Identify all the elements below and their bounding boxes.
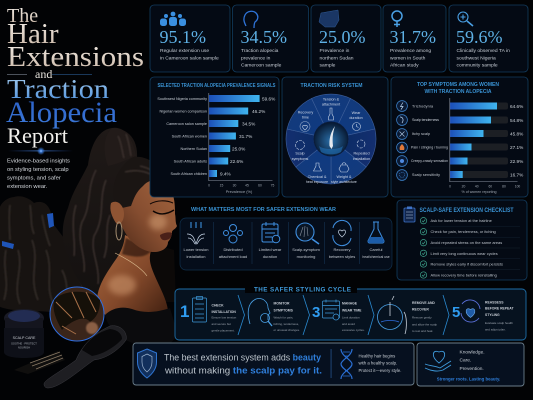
bar chart: 46.2% xyxy=(252,109,265,114)
illustration: scalp close-up xyxy=(50,287,104,341)
bar chart: 30 xyxy=(233,184,236,188)
bar chart: 34.5% xyxy=(242,122,255,126)
item: careful heat: Careful xyxy=(370,247,383,252)
bar chart: 59.6% xyxy=(262,96,275,102)
stat card: South African women: African study xyxy=(390,63,419,69)
icon: clipboard xyxy=(404,206,415,222)
segment labels: attachment xyxy=(322,102,340,106)
subtitle text block: extension wear. xyxy=(7,184,48,190)
panel: what matters icons xyxy=(180,218,392,270)
wheel diagram xyxy=(286,94,376,184)
stat card: northern Sudan: northern Sudan xyxy=(320,55,354,61)
bars: symptoms: 64.6% xyxy=(510,104,523,109)
item: recovery: between styles xyxy=(329,254,355,259)
stat card: traction alopecia Cameroon: Cameroon sample xyxy=(241,63,282,69)
segment labels: time xyxy=(302,116,309,120)
item: recovery: Recovery xyxy=(334,247,350,252)
side text xyxy=(358,354,401,373)
step 1 xyxy=(180,296,237,332)
heading: TRACTION RISK SYSTEM xyxy=(300,83,362,89)
stat card: northern Sudan xyxy=(311,5,381,72)
step 4: REMOVE AND xyxy=(412,301,435,305)
panel: prevalence bar chart xyxy=(150,77,279,197)
icon: shield xyxy=(138,349,156,378)
bar chart: 60 xyxy=(258,184,262,188)
item: scalp monitoring: Scalp-symptom xyxy=(292,247,320,252)
item: distributed load: Distributed xyxy=(223,247,243,252)
bars: symptoms: 0 xyxy=(449,184,451,188)
stat card: regular extension use xyxy=(150,5,230,72)
bar chart: Nigerian women comparison xyxy=(159,110,207,114)
step 3: excessive cycles. xyxy=(342,328,365,332)
bars: symptoms: 60 xyxy=(488,184,492,188)
stat card: traction alopecia Cameroon: prevalence in xyxy=(241,55,271,61)
title xyxy=(6,5,144,155)
necklace xyxy=(115,253,147,276)
ear xyxy=(110,202,124,224)
bars: symptoms: 45.8% xyxy=(510,132,523,136)
step 2: MONITOR xyxy=(274,302,290,306)
stat card: southwest Nigeria: community sample xyxy=(456,63,498,69)
bar chart xyxy=(157,93,275,194)
bar chart: 0 xyxy=(208,184,210,188)
segment icons xyxy=(296,108,365,172)
bar chart: 15 xyxy=(220,184,223,188)
chevrons xyxy=(238,295,449,335)
icon: heart in hand xyxy=(425,351,451,371)
icon: Sudan map xyxy=(319,10,339,27)
step 3: Limit duration xyxy=(342,316,360,320)
icons: symptoms xyxy=(397,101,407,180)
item: scalp monitoring: monitoring xyxy=(297,254,315,259)
segment labels: symptoms xyxy=(292,157,309,161)
bar chart: South African children xyxy=(171,172,207,176)
callout: knowledge, care, prevention: Knowledge. xyxy=(460,350,485,356)
step 2: itching, tenderness, xyxy=(274,322,299,326)
illustration: hair bundles xyxy=(0,196,99,312)
panel: traction risk system xyxy=(282,77,388,197)
icon: magnifier xyxy=(458,12,473,26)
subtitle text block: symptoms, and safer xyxy=(7,175,61,181)
hair behind neck right xyxy=(140,240,176,302)
step 5: STYLING xyxy=(485,313,500,317)
panel: top symptoms xyxy=(391,77,528,197)
step 1: 1 xyxy=(180,302,189,321)
segment labels: Scalp xyxy=(295,152,305,156)
title: The xyxy=(7,5,38,27)
segment labels: Chemical & xyxy=(308,175,327,179)
step 2: or unusual changes. xyxy=(274,328,300,332)
stat card: regular extension use: 95.1% xyxy=(160,27,206,47)
subtitle text block: Evidence-based insights xyxy=(7,159,70,165)
highlight on shoulder xyxy=(108,275,136,295)
bar chart: South African adults xyxy=(174,160,207,164)
stat card: southwest Nigeria xyxy=(449,5,528,72)
bars: symptoms: 100 xyxy=(515,184,520,188)
hair back mass xyxy=(63,128,150,296)
cheek highlight xyxy=(149,214,167,230)
step 5: Evaluate scalp health xyxy=(485,321,513,325)
step 3: WEAR TIME xyxy=(342,308,362,312)
bar chart: Prevalence (%) xyxy=(226,189,253,194)
segment labels: heat exposure xyxy=(306,180,328,184)
icon: head profile xyxy=(244,11,258,28)
step 5 xyxy=(452,300,515,332)
segment labels: style architecture xyxy=(331,180,357,184)
callout: beauty without scalp cost: without making the scalp pay for it. xyxy=(164,366,322,376)
bars: symptoms: % of women reporting xyxy=(462,190,496,194)
icon: people xyxy=(160,12,186,26)
checklist items xyxy=(420,218,520,278)
segment labels: duration xyxy=(349,116,363,120)
symptom labels: Pain / stinging / burning xyxy=(411,146,448,150)
step 1: Ensure low tension xyxy=(212,316,237,320)
bar chart: 31.7% xyxy=(239,134,252,139)
bars: symptoms: 22.9% xyxy=(510,159,523,164)
side text: Healthy hair begins xyxy=(358,354,395,358)
step 1: CHECK xyxy=(212,304,224,308)
checklist items: Avoid repeated stress on the same areas xyxy=(430,240,502,245)
side text: Protect it—every style. xyxy=(358,368,401,373)
stat card: South African women xyxy=(383,5,446,72)
bar chart: 75 xyxy=(271,184,274,188)
item: limited wear: duration xyxy=(263,254,277,259)
subtitle text block: on styling tension, scalp xyxy=(7,167,69,173)
segment labels: Weight & xyxy=(337,175,352,179)
neck shadow xyxy=(122,238,152,257)
stat card: South African women: women in South xyxy=(390,55,426,61)
stat card: southwest Nigeria: Clinically observed TA in xyxy=(456,48,510,54)
illustration: hair brush and comb xyxy=(14,326,126,388)
heading: SELECTED TRACTION ALOPECIA PREVALENCE SIGNALS xyxy=(158,83,276,89)
stat card: northern Sudan: 25.0% xyxy=(319,27,366,47)
bars: symptoms: 20 xyxy=(462,184,465,188)
step 3 xyxy=(312,300,365,332)
title: Hair xyxy=(7,18,59,50)
segment labels: Repeated xyxy=(354,152,370,156)
title: Alopecia xyxy=(6,96,117,129)
title: Report xyxy=(7,123,68,148)
item: scalp monitoring xyxy=(292,223,320,259)
item: recovery xyxy=(329,220,355,259)
bar chart: 22.6% xyxy=(230,159,243,164)
step 4: Remove gently xyxy=(412,316,432,320)
symptom labels xyxy=(411,104,448,177)
symptom labels: Scalp tenderness xyxy=(412,118,439,122)
symptom labels: Creepy-crawly sensation xyxy=(411,159,448,163)
heading: what matters most: WHAT MATTERS MOST FOR SAFER EXTENSION WEAR xyxy=(191,207,337,213)
bar chart: South African women xyxy=(172,134,207,138)
step 5: REASSESS xyxy=(485,300,504,304)
illustration: woman with ponytail xyxy=(63,128,178,344)
stat card: traction alopecia Cameroon xyxy=(232,5,308,72)
bar chart: Northern Sudan xyxy=(181,147,207,151)
earring xyxy=(116,222,122,240)
heading: THE SAFER STYLING CYCLE xyxy=(254,286,351,294)
checklist items: Check for pain, tenderness, or itching xyxy=(430,229,496,234)
item: lower tension xyxy=(184,222,208,259)
illustration: scalp care jar: NOURISH xyxy=(18,346,30,350)
step 4: and allow the scalp xyxy=(412,322,437,326)
bars: symptoms: 27.1% xyxy=(510,145,523,150)
bar chart: 45 xyxy=(245,184,249,188)
step 1: INSTALLATION xyxy=(212,310,236,314)
illustration: scalp care jar xyxy=(4,309,44,358)
step 4: RECOVER xyxy=(412,308,429,312)
symptom labels: Itchy scalp xyxy=(412,132,430,136)
item: careful heat xyxy=(362,222,390,259)
item: lower tension: Lower tension xyxy=(184,247,208,252)
segment labels: Recovery xyxy=(298,110,313,114)
stat card: regular extension use: in Cameroon salon sample xyxy=(160,55,219,61)
step 3: and avoid xyxy=(342,322,355,326)
title: Traction xyxy=(7,74,110,104)
bar chart: Southwest Nigeria community xyxy=(157,97,207,101)
callout: beauty without scalp cost xyxy=(133,343,414,385)
step 1: and secure but xyxy=(212,322,231,326)
checklist items: Limit very long continuous wear cycles xyxy=(430,251,498,256)
statement: The best extension system adds beauty xyxy=(164,352,321,362)
hair highlights xyxy=(73,134,162,284)
bars: symptoms: 80 xyxy=(502,184,506,188)
bars: symptoms xyxy=(449,98,523,194)
callout: knowledge, care, prevention: Prevention. xyxy=(460,366,484,372)
hub: hair follicle xyxy=(314,122,348,156)
step 1: gentle placement. xyxy=(212,328,235,332)
segment labels: Tension & xyxy=(323,98,340,102)
stat card: northern Sudan: Prevalence in xyxy=(320,48,350,54)
step 2 xyxy=(248,299,300,332)
stat card: southwest Nigeria: southwest Nigeria xyxy=(456,55,496,61)
lips xyxy=(160,232,172,240)
symptom labels: Trichodynia xyxy=(412,104,434,108)
callout: knowledge, care, prevention: Stronger roots. Lasting beauty. xyxy=(437,376,500,382)
step 2: SYMPTOMS xyxy=(274,308,294,312)
callout: knowledge, care, prevention xyxy=(417,343,524,386)
bars: symptoms: 40 xyxy=(475,184,479,188)
panel: safer styling cycle xyxy=(175,285,526,340)
subtitle text block xyxy=(7,159,70,190)
bars: symptoms: 16.7% xyxy=(510,172,523,178)
forehead highlight xyxy=(153,187,167,197)
eye and brow xyxy=(150,201,173,204)
step 4 xyxy=(378,296,437,334)
bar chart: 9.4% xyxy=(220,172,231,176)
checklist items: Remove styles early if discomfort persists xyxy=(430,262,503,266)
chest and neck xyxy=(97,235,168,316)
checklist items: Allow recovery time before reinstalling xyxy=(430,272,497,278)
title: Extensions xyxy=(7,41,144,73)
step 4: to rest and heal. xyxy=(412,329,433,333)
step 5: 5 xyxy=(452,304,460,321)
panel: top symptoms: WITH TRACTION ALOPECIA xyxy=(424,89,492,95)
item: distributed load: attachment load xyxy=(219,254,247,259)
callout: knowledge, care, prevention: Care. xyxy=(460,358,471,364)
item: distributed load xyxy=(219,224,247,259)
icon: DNA xyxy=(341,349,352,379)
segment labels xyxy=(292,98,370,184)
stat card: regular extension use: Regular extension use xyxy=(160,48,209,54)
step 2: Watch for pain, xyxy=(274,316,293,320)
panel: scalp-safe checklist xyxy=(397,200,527,280)
step 3: 3 xyxy=(312,304,320,321)
stat card: South African women: 31.7% xyxy=(390,27,436,47)
face xyxy=(117,180,177,252)
heading: SCALP-SAFE EXTENSION CHECKLIST xyxy=(420,208,514,214)
bar chart: 25.0% xyxy=(232,146,245,152)
stat card: traction alopecia Cameroon: Traction alopecia xyxy=(241,48,279,54)
step 5: and adjust plan. xyxy=(485,328,506,332)
item: limited wear xyxy=(259,222,282,259)
step 5: BEFORE REPEAT xyxy=(485,306,515,310)
bars: symptoms: 54.8% xyxy=(510,118,523,123)
step 3: MANAGE xyxy=(342,302,358,306)
segment labels: Wear xyxy=(352,111,361,115)
item: careful heat: heat/chemical use xyxy=(362,255,390,259)
title: and xyxy=(35,67,52,81)
hair top xyxy=(113,157,168,208)
symptom labels: Scalp sensitivity xyxy=(412,173,440,177)
black dress xyxy=(105,308,178,344)
ponytail wrap xyxy=(105,128,136,166)
icon: female symbol xyxy=(392,11,402,27)
stat card: northern Sudan: sample xyxy=(320,63,336,69)
illustration: scalp care jar: SCALP CARE xyxy=(13,336,36,340)
bar chart: Cameroon salon sample xyxy=(166,122,207,126)
side text: with a healthy scalp. xyxy=(358,361,397,366)
segment labels: installation xyxy=(353,157,370,161)
stat card: traction alopecia Cameroon: 34.5% xyxy=(240,27,287,47)
stat card: South African women: Prevalence among xyxy=(390,48,431,54)
checklist items: Ask for lower tension at the hairline xyxy=(430,218,493,223)
item: lower tension: installation xyxy=(187,254,205,259)
item: limited wear: Limited wear xyxy=(259,247,282,252)
illustration: scalp care jar: SOOTHE · PROTECT xyxy=(11,342,37,346)
stat card: southwest Nigeria: 59.6% xyxy=(456,27,502,47)
heading: TOP SYMPTOMS AMONG WOMEN xyxy=(417,82,499,88)
